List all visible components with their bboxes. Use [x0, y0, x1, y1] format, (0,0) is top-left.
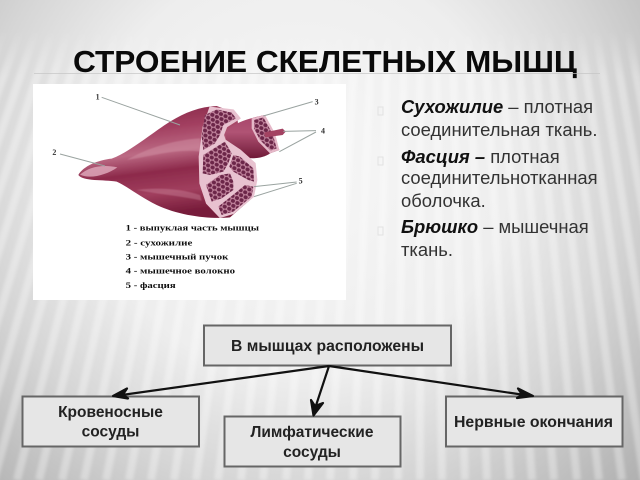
- box: lymph vessels: [224, 416, 400, 466]
- definition: belly: ткань.: [401, 239, 453, 260]
- diagram numbers: 2: [52, 148, 56, 157]
- definition: fascia: Фасция –: [401, 146, 485, 167]
- diagram legend: 4 - мышечное волокно: [126, 267, 235, 276]
- definition: belly: Брюшко: [401, 216, 478, 237]
- arrow: to lymph vessels: [311, 366, 329, 416]
- definition: tendon: соединительная ткань.: [401, 119, 597, 140]
- arrow: to nerve endings: [329, 366, 533, 398]
- title underline: [34, 73, 600, 74]
- fibre: [264, 129, 286, 137]
- illustration: muscle: [78, 106, 286, 218]
- muscle belly: [78, 106, 257, 218]
- box: lymph vessels: Лимфатические: [251, 424, 374, 441]
- box: lymph vessels: сосуды: [283, 444, 341, 461]
- main cross-section: [199, 107, 257, 217]
- inner bundle: [225, 115, 279, 158]
- diagram legend: 5 - фасция: [126, 281, 176, 290]
- diagram legend: 1 - выпуклая часть мышцы: [126, 224, 260, 233]
- tendon highlight: [80, 166, 117, 177]
- box: nerve endings: Нервные окончания: [454, 414, 613, 431]
- definition: tendon: – плотная: [503, 96, 593, 117]
- definition: tendon: Сухожилие: [401, 96, 503, 117]
- definition: belly: – мышечная: [478, 216, 589, 237]
- diagram legend: 2 - сухожилие: [126, 238, 193, 247]
- arrows: [113, 366, 533, 416]
- definition: fascia: оболочка.: [401, 190, 486, 211]
- title: СТРОЕНИЕ СКЕЛЕТНЫХ МЫШЦ: [73, 44, 577, 79]
- box: in muscles: [204, 326, 451, 366]
- box: blood vessels: Кровеносные: [58, 404, 163, 421]
- diagram numbers: 1: [96, 93, 100, 102]
- fascicles: [202, 109, 254, 215]
- diagram numbers: 3: [315, 97, 319, 106]
- diagram numbers: 5: [299, 176, 303, 185]
- flow chart boxes: [22, 326, 622, 466]
- diagram legend: 3 - мышечный пучок: [126, 252, 229, 261]
- panel: muscle diagram: [33, 84, 346, 300]
- box: blood vessels: сосуды: [82, 424, 139, 440]
- definition: fascia: плотная: [485, 146, 560, 167]
- image background: [33, 84, 346, 300]
- bullet markers: [378, 107, 383, 235]
- arrow: to blood vessels: [113, 366, 329, 398]
- diagram numbers: [52, 93, 325, 185]
- box: nerve endings: [446, 396, 622, 446]
- leader lines: [60, 97, 316, 197]
- definitions text block: [378, 96, 598, 260]
- definition: fascia: соединительнотканная: [401, 167, 598, 188]
- diagram numbers: 4: [321, 126, 325, 135]
- belly sheen: [127, 138, 201, 160]
- bundle cross-section: [252, 115, 279, 153]
- box: in muscles: В мышцах расположены: [231, 338, 424, 355]
- box: blood vessels: [22, 396, 199, 446]
- diagram legend: [126, 224, 260, 290]
